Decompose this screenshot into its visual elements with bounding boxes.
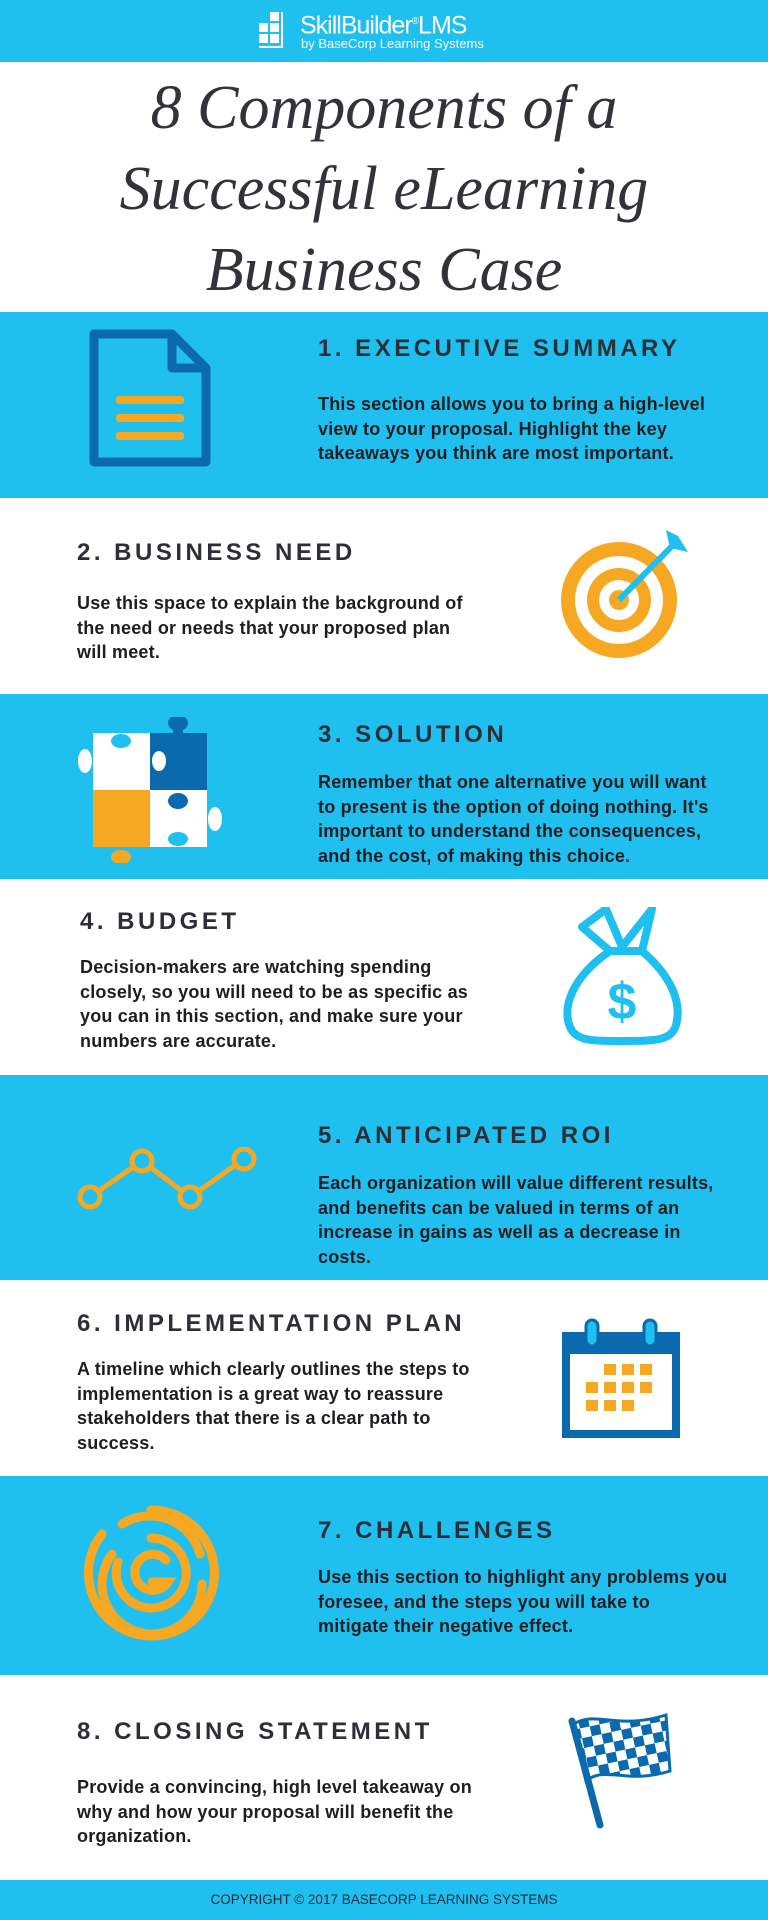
text: organization. (77, 1826, 192, 1846)
text: takeaways you think are most important. (318, 443, 674, 463)
text: increase in gains as well as a decrease in (318, 1222, 681, 1242)
icon: calendar (562, 1318, 680, 1438)
text: you can in this section, and make sure your (80, 1006, 463, 1026)
title: Successful eLearning (120, 155, 648, 223)
panel: 1 executive summary (0, 312, 768, 498)
text: numbers are accurate. (80, 1030, 276, 1050)
text: Provide a convincing, high level takeaway on (77, 1777, 472, 1797)
header band (0, 0, 768, 62)
text: Each organization will value different results, (318, 1173, 714, 1193)
text: A timeline which clearly outlines the steps to (77, 1359, 470, 1379)
heading: 3. SOLUTION (318, 721, 507, 748)
text (318, 1173, 714, 1266)
text: important to understand the consequences, (318, 821, 701, 841)
panel: 3 solution (0, 694, 768, 879)
text (318, 772, 709, 866)
text (80, 957, 468, 1050)
title: Business Case (206, 236, 562, 304)
heading: 8. CLOSING STATEMENT (77, 1718, 433, 1745)
icon: target (561, 530, 688, 658)
heading: 7. CHALLENGES (318, 1517, 556, 1544)
text (318, 1567, 727, 1636)
text (77, 593, 463, 662)
title: 8 Components of a (151, 74, 617, 142)
text: stakeholders that there is a clear path to (77, 1408, 431, 1428)
footer: COPYRIGHT © 2017 BASECORP LEARNING SYSTEMS (210, 1892, 558, 1907)
footer (0, 1880, 768, 1920)
text: implementation is a great way to reassure (77, 1384, 443, 1404)
text: and the cost, of making this choice. (318, 846, 630, 866)
icon: line chart (78, 1147, 256, 1210)
text: and benefits can be valued in terms of an (318, 1198, 679, 1218)
text: Use this section to highlight any problems you (318, 1567, 727, 1587)
text: Remember that one alternative you will want (318, 772, 707, 792)
text: Use this space to explain the background of (77, 593, 463, 613)
text: mitigate their negative effect. (318, 1616, 573, 1636)
text: closely, so you will need to be as specific as (80, 982, 468, 1002)
text (77, 1777, 472, 1846)
icon: maze (84, 1506, 219, 1640)
text: This section allows you to bring a high-level (318, 394, 705, 414)
text: success. (77, 1432, 155, 1452)
text: the need or needs that your proposed plan (77, 618, 450, 638)
panel: 5 anticipated ROI (0, 1075, 768, 1280)
panel: 2 business need (77, 530, 688, 662)
text (318, 394, 705, 463)
panel: 7 challenges (0, 1476, 768, 1675)
heading: 1. EXECUTIVE SUMMARY (318, 335, 680, 362)
title (120, 74, 648, 304)
text: will meet. (77, 642, 160, 662)
text (77, 1359, 470, 1452)
text: to present is the option of doing nothing. It's (318, 796, 709, 816)
panel: 8 closing statement (77, 1713, 672, 1846)
text: foresee, and the steps you will take to (318, 1592, 650, 1612)
logo (259, 11, 484, 51)
heading: 6. IMPLEMENTATION PLAN (77, 1310, 465, 1337)
text: view to your proposal. Highlight the key (318, 418, 667, 438)
text: Decision-makers are watching spending (80, 957, 432, 977)
logo text: SkillBuilder®LMS (300, 11, 466, 39)
panel: 6 implementation plan (77, 1310, 680, 1452)
icon: money bag (563, 907, 682, 1045)
text: why and how your proposal will benefit the (77, 1802, 453, 1822)
heading: 4. BUDGET (80, 908, 240, 935)
panel: 4 budget (80, 907, 682, 1050)
icon: document (90, 330, 210, 466)
heading: 5. ANTICIPATED ROI (318, 1122, 614, 1149)
icon: logo squares (259, 12, 283, 48)
logo: by BaseCorp Learning Systems (301, 36, 484, 51)
icon: checkered flag (568, 1713, 672, 1828)
heading: 2. BUSINESS NEED (77, 539, 356, 566)
text: costs. (318, 1246, 371, 1266)
icon: puzzle (78, 717, 222, 863)
icon: money bag: $ (608, 973, 637, 1031)
